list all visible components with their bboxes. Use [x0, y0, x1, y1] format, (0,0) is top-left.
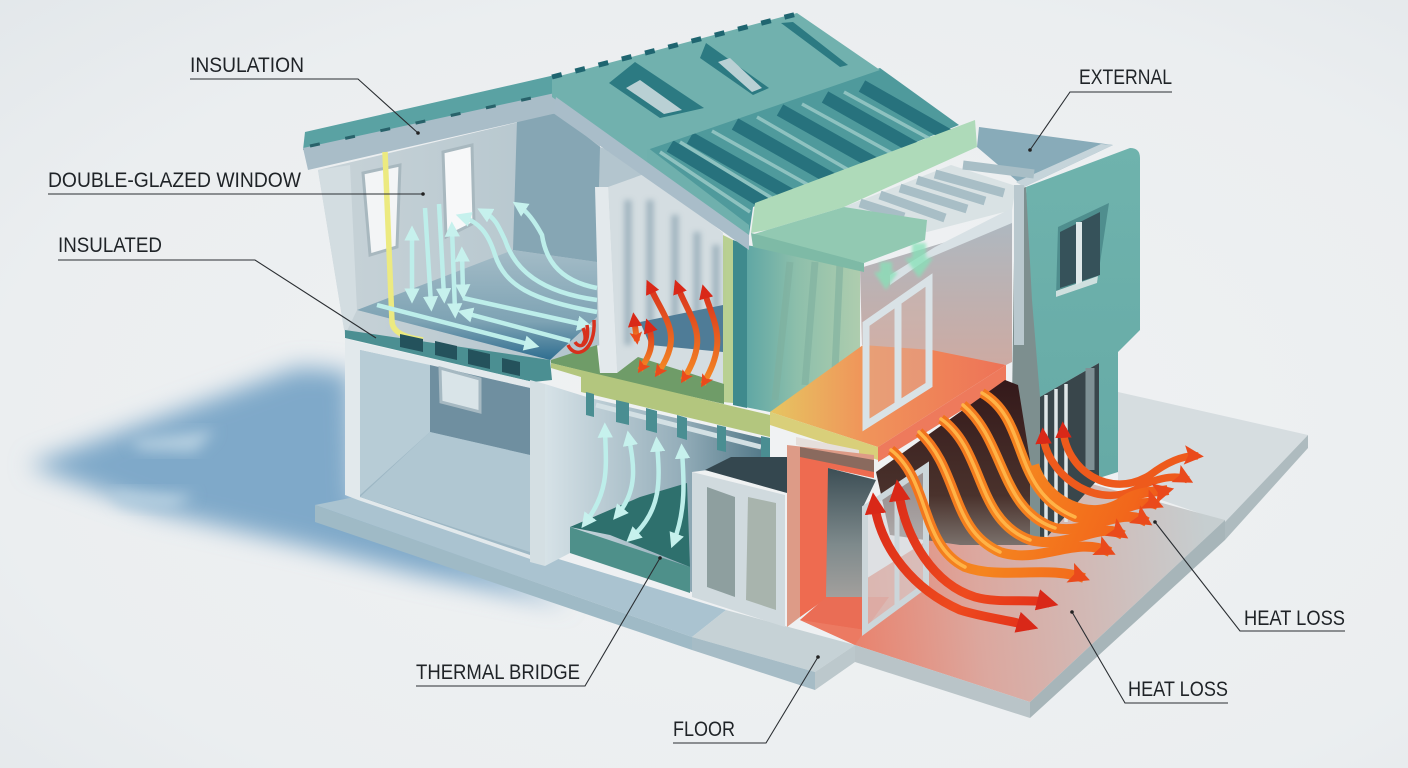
label: floor: FLOOR	[673, 718, 735, 741]
eave slab	[751, 120, 977, 272]
floor slab	[315, 392, 1308, 718]
label: insulation: INSULATION	[190, 54, 304, 77]
upper right window	[866, 280, 929, 425]
label: external: EXTERNAL	[1079, 66, 1172, 89]
left room windows	[363, 145, 474, 255]
upper roof panel	[552, 13, 880, 165]
label: insulation	[190, 54, 420, 135]
roof openings	[609, 62, 704, 118]
cast shadow	[28, 367, 570, 605]
small red curl at floor	[568, 320, 594, 352]
lower-left room	[345, 338, 545, 566]
back walls of upper-left room	[318, 113, 600, 362]
label: heat loss lower: HEAT LOSS	[1128, 678, 1228, 701]
label: heat loss right	[1153, 520, 1345, 631]
middle room warm arrows	[634, 285, 717, 384]
upper left cold air arrows	[377, 204, 597, 345]
upper floor slab with joists	[345, 330, 770, 437]
label: double-glazed window	[48, 169, 425, 196]
middle room partition	[595, 147, 723, 385]
label: double-glazed window: DOUBLE-GLAZED WINDOW	[48, 169, 301, 192]
label: heat loss right: HEAT LOSS	[1244, 607, 1345, 630]
label: heat loss lower	[1070, 610, 1228, 703]
yellow insulation strip	[385, 152, 423, 340]
label: thermal bridge	[416, 556, 662, 686]
teal wall under eave	[723, 235, 860, 412]
right tower	[1010, 148, 1140, 545]
heated corner room	[787, 380, 1030, 645]
small green arrows under eave	[874, 243, 933, 290]
lower rafter panel	[647, 68, 959, 235]
heat loss arrows	[874, 393, 1198, 626]
label: thermal bridge: THERMAL BRIDGE	[416, 661, 580, 684]
lower middle room	[545, 384, 770, 593]
thermal bridge cold arrows	[586, 430, 684, 541]
upper right room	[860, 208, 1012, 365]
lower double door	[692, 457, 787, 627]
external box and ceiling beams	[844, 127, 1113, 345]
label: insulated: INSULATED	[58, 234, 162, 257]
label: external	[1028, 66, 1172, 152]
roof	[552, 13, 959, 250]
heated floor	[770, 345, 1006, 462]
label: insulated	[58, 234, 376, 338]
label: floor	[673, 655, 820, 743]
right rafter fascia	[553, 97, 749, 250]
eave roof, left	[303, 75, 557, 170]
ceiling joists lower	[586, 392, 770, 465]
